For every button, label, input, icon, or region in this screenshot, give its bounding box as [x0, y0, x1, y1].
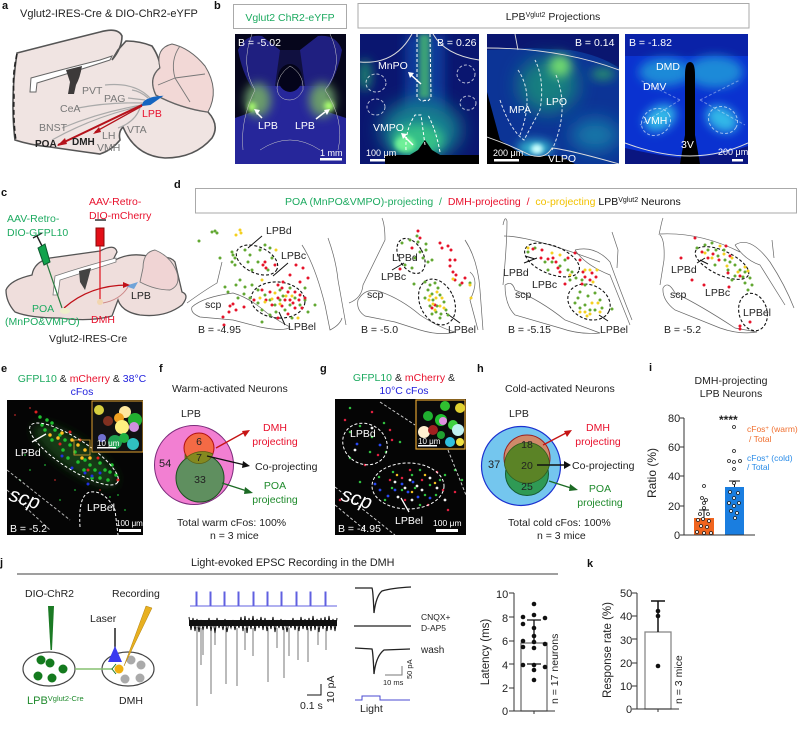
labels c	[5, 196, 152, 345]
spontaneous trace	[189, 616, 337, 706]
map B=-5.2: B = -5.2	[664, 324, 701, 336]
labels c: AAV-Retro-	[7, 213, 60, 225]
micrograph e: LPBd	[15, 447, 41, 459]
micrograph B=-1.82	[625, 34, 748, 164]
region labels: DMH	[72, 137, 95, 148]
title g: GFPL10 & mCherry &	[353, 372, 455, 384]
header: Vglut2 ChR2-eYFP	[234, 4, 346, 28]
header: LPB Vglut2 projections: Vglut2	[526, 12, 546, 19]
panel j: electrophysiology	[0, 557, 561, 718]
brain outline c	[6, 247, 186, 320]
venn labels h: Total cold cFos: 100%	[508, 517, 611, 529]
map B=-5.15: scp	[515, 289, 532, 301]
dashed cut edge	[13, 54, 17, 141]
recording schematic: DMH	[119, 695, 143, 707]
micrograph e: scp	[6, 484, 43, 514]
micrograph B=0.26: 100 μm	[366, 148, 396, 158]
legend i: (warm)	[769, 424, 798, 434]
latency chart: 8	[502, 613, 508, 625]
venn labels f: DMH	[263, 422, 287, 434]
brain outline	[13, 30, 215, 158]
header: LPB Vglut2 projections	[358, 4, 749, 28]
title h: Cold-activated Neurons	[505, 383, 615, 395]
cerebellum c	[140, 250, 178, 290]
micrograph B=0.14	[487, 34, 619, 165]
region labels: PVT	[82, 85, 103, 97]
panel letter g: g	[320, 363, 327, 375]
latency chart: 6	[502, 636, 508, 648]
micrograph g: LPBd	[350, 428, 376, 440]
evoked labels: D-AP5	[421, 623, 446, 633]
map B=-5.2: scp	[670, 289, 686, 301]
micrograph e: B = -5.2	[10, 523, 47, 535]
venn labels f: POA	[264, 480, 286, 492]
legend i: / Total	[747, 462, 770, 472]
callosum c	[53, 258, 116, 295]
venn labels h: POA	[589, 483, 611, 495]
panel g: cold micrograph	[320, 363, 466, 535]
axes k: 50	[620, 588, 632, 600]
venn labels h: projecting	[575, 436, 621, 448]
recording schematic: DIO-ChR2	[25, 588, 74, 600]
panel a: brain schematic	[2, 0, 215, 158]
latency chart: 4	[502, 660, 508, 672]
latency chart: 2	[502, 683, 508, 695]
venn circles f: 54	[159, 458, 171, 470]
labels c: DMH	[91, 314, 115, 326]
map B=-5.0: B = -5.0	[361, 324, 398, 336]
region labels: BNST	[39, 122, 68, 134]
grey projections	[52, 85, 150, 140]
legend i: cFos	[747, 424, 765, 434]
panel letter f: f	[159, 363, 163, 375]
panel e: warm micrograph	[1, 363, 147, 535]
region labels: LH	[102, 130, 115, 142]
panel c: viral injection schematic	[1, 187, 186, 345]
evoked labels: 10 ms	[383, 678, 404, 687]
panel b: projections	[214, 0, 749, 165]
ventricle	[66, 66, 82, 94]
light pulses	[190, 592, 337, 606]
region labels: PAG	[104, 93, 125, 105]
recording schematic: Recording	[112, 588, 160, 600]
venn labels f	[177, 422, 318, 542]
title i: DMH-projecting	[695, 375, 768, 387]
labels c: Vglut2-IRES-Cre	[49, 333, 127, 345]
venn circles f: 6	[196, 436, 202, 448]
venn labels h: Co-projecting	[572, 460, 635, 472]
micrograph g: B = -4.95	[338, 523, 381, 535]
venn labels f: Co-projecting	[255, 461, 318, 473]
red syringe	[95, 220, 106, 301]
labels c: DIO-GFPL10	[7, 227, 68, 239]
map B=-5.2: LPBel	[743, 307, 771, 319]
cerebellum	[153, 44, 213, 112]
micrograph B=0.14: VLPO	[548, 153, 576, 165]
micrograph B=-5.02: 1 mm	[320, 148, 342, 158]
ventricle c	[79, 268, 91, 290]
recording schematic: Vglut2-Cre	[48, 694, 84, 703]
LPB label h: LPB	[509, 408, 529, 420]
map B=-5.0: scp	[367, 289, 384, 301]
sample size k: n = 3 mice	[673, 655, 685, 704]
legend box: POA (MnPO&VMPO)-projecting / DMH-projecting / co-projecting LPB	[285, 196, 618, 208]
title f: Warm-activated Neurons	[172, 383, 288, 395]
micrograph B=-5.02: LPB	[295, 120, 315, 132]
map B=-4.95: LPBc	[281, 250, 306, 262]
venn labels h: DMH	[586, 422, 610, 434]
significance stars: ****	[719, 413, 738, 427]
map B=-5.15	[503, 219, 632, 336]
micrograph g: LPBel	[395, 515, 423, 527]
evoked labels: Light	[360, 703, 383, 715]
map B=-5.15: B = -5.15	[508, 324, 551, 336]
latency chart: n = 17 neurons	[549, 634, 561, 704]
micrograph B=0.26: VMPO	[373, 122, 404, 134]
recording schematic: LPB	[27, 695, 48, 707]
map B=-5.2: LPBd	[671, 264, 697, 276]
panel letter i: i	[649, 362, 652, 374]
map B=-5.15: LPBel	[600, 324, 628, 336]
region labels: POA	[35, 139, 57, 150]
legend i: +	[765, 426, 769, 432]
micrograph g: scp	[338, 484, 375, 514]
map B=-5.0	[349, 218, 483, 336]
panel letter c: c	[1, 187, 7, 199]
legend i: / Total	[749, 434, 772, 444]
panel f: warm venn	[154, 363, 318, 542]
legend box	[196, 188, 796, 213]
axes i: Ratio (%)	[645, 448, 659, 498]
axes i: 20	[668, 501, 680, 513]
axes k: 40	[620, 611, 632, 623]
trace scale bar: 0.1 s	[300, 700, 323, 712]
latency chart: 10	[496, 589, 508, 601]
region labels: VMH	[97, 142, 120, 154]
panel letter a: a	[2, 0, 9, 12]
labels c: DIO-mCherry	[89, 210, 152, 222]
data points	[696, 426, 742, 534]
venn circles f: 7	[196, 452, 202, 464]
micrograph B=-1.82: VMH	[644, 115, 667, 127]
axes i: 60	[668, 442, 680, 454]
axes i: 40	[668, 471, 680, 483]
labels c: (MnPO&VMPO)	[5, 316, 80, 328]
axes i	[645, 413, 755, 542]
red projections	[58, 105, 142, 145]
micrograph g	[335, 399, 466, 535]
axes k: Response rate (%)	[602, 602, 614, 698]
evoked labels	[360, 612, 451, 715]
micrograph B=0.26: B = 0.26	[437, 37, 477, 49]
venn circles f: 33	[194, 474, 206, 486]
arrows h	[537, 430, 578, 491]
evoked labels: 50 pA	[405, 659, 414, 679]
recording schematic	[23, 588, 160, 707]
LPB label: LPB	[181, 408, 201, 420]
panel g: cold micrograph: 10°C cFos	[379, 385, 429, 397]
arrows f	[207, 430, 253, 494]
header: LPB Vglut2 projections: LPB	[506, 11, 526, 23]
panel i: bar chart	[645, 362, 798, 542]
venn circles h: 37	[488, 459, 500, 471]
map B=-5.0: LPBd	[392, 252, 418, 264]
panel letter b: b	[214, 0, 221, 12]
micrograph B=0.26	[358, 34, 479, 164]
micrograph e	[6, 400, 143, 535]
map B=-4.95: LPBel	[288, 321, 316, 333]
bars	[694, 481, 744, 535]
micrograph B=0.14: LPO	[546, 96, 567, 108]
venn circles h: 18	[521, 439, 533, 451]
axes k: 10	[620, 681, 632, 693]
legend box: Neurons	[638, 196, 681, 208]
micrograph e: 100 μm	[116, 519, 143, 528]
venn labels f: projecting	[252, 494, 298, 506]
panel h: cold venn	[477, 363, 635, 542]
micrograph B=-1.82: 3V	[681, 139, 694, 151]
corpus callosum	[30, 56, 112, 92]
latency chart: Latency (ms)	[480, 619, 492, 685]
trace scale bar	[300, 676, 337, 712]
venn labels f: Total warm cFos: 100%	[177, 517, 286, 529]
micrograph B=0.26: MnPO	[378, 60, 408, 72]
venn labels h: projecting	[577, 497, 623, 509]
region labels: LPB	[142, 108, 162, 120]
axes i: 80	[668, 413, 680, 425]
micrograph B=-1.82: DMV	[643, 81, 666, 93]
panel i: bar chart: LPB Neurons	[700, 388, 762, 400]
latency chart	[480, 589, 561, 718]
venn circles h	[482, 426, 560, 506]
trace scale bar: 10 pA	[325, 676, 337, 703]
venn labels f: n = 3 mice	[210, 530, 259, 542]
title a: Vglut2-IRES-Cre & DIO-ChR2-eYFP	[20, 8, 198, 20]
map B=-5.15: LPBc	[532, 279, 557, 291]
labels c: LPB	[131, 290, 151, 302]
micrograph B=-1.82: 200 μm	[718, 147, 748, 157]
title j: Light-evoked EPSC Recording in the DMH	[191, 557, 394, 569]
micrograph g: 100 μm	[433, 518, 462, 528]
evoked labels: CNQX+	[421, 612, 451, 622]
map B=-5.0: LPBel	[448, 324, 476, 336]
panel letter h: h	[477, 363, 484, 375]
venn labels h	[508, 422, 635, 542]
panel letter d: d	[174, 179, 181, 191]
micrograph B=0.14: MPA	[509, 104, 531, 116]
inset e: 10 μm	[97, 439, 120, 448]
rule	[17, 573, 558, 575]
LPB blue area	[142, 97, 160, 105]
region labels: CeA	[60, 103, 80, 115]
evoked labels: wash	[420, 645, 444, 656]
panel letter k: k	[587, 558, 594, 570]
axes k	[602, 588, 679, 716]
venn labels h: n = 3 mice	[537, 530, 586, 542]
bar k	[645, 632, 671, 709]
venn circles f	[154, 426, 234, 504]
axes k: 20	[620, 658, 632, 670]
recording schematic: Laser	[90, 613, 117, 625]
panel e: warm micrograph: cFos	[71, 386, 93, 398]
region labels: VTA	[127, 124, 147, 136]
title e: GFPL10 & mCherry & 38°C	[18, 373, 147, 385]
map B=-4.95	[187, 225, 346, 336]
labels c: POA	[32, 303, 54, 315]
panel letter e: e	[1, 363, 7, 375]
micrograph B=-5.02	[235, 34, 346, 164]
inset g: 10 μm	[418, 437, 441, 446]
micrograph B=-5.02: B = -5.02	[238, 37, 281, 49]
micrograph B=0.14: 200 μm	[493, 148, 523, 158]
map B=-5.2: LPBc	[705, 287, 730, 299]
error bar and points	[651, 601, 665, 668]
micrograph B=-1.82: B = -1.82	[629, 37, 672, 49]
axes i: 0	[674, 530, 680, 542]
micrograph B=-5.02: LPB	[258, 120, 278, 132]
axes k: 30	[620, 635, 632, 647]
green syringe	[33, 233, 62, 308]
venn circles h: 20	[521, 460, 533, 472]
labels c: AAV-Retro-	[89, 196, 142, 208]
legend i: +	[765, 455, 769, 461]
map B=-4.95: LPBd	[266, 225, 292, 237]
header: Vglut2 ChR2-eYFP: Vglut2 ChR2-eYFP	[245, 12, 335, 24]
axes k: 0	[626, 704, 632, 716]
panel letter j: j	[0, 557, 3, 569]
panel d: neuron maps	[174, 179, 796, 336]
legend i	[747, 424, 798, 472]
panel k: response rate chart	[587, 558, 685, 716]
legend i: cFos	[747, 453, 765, 463]
evoked traces	[354, 587, 411, 700]
latency chart: 0	[502, 706, 508, 718]
map B=-5.2	[659, 218, 794, 336]
map B=-4.95: B = -4.95	[198, 324, 241, 336]
legend box: Vglut2	[618, 197, 638, 204]
header: LPB Vglut2 projections: Projections	[545, 11, 600, 23]
micrograph e: LPBel	[87, 502, 115, 514]
LPB blue and retrograde arrows	[60, 282, 138, 314]
legend i: (cold)	[769, 453, 793, 463]
venn circles h: 25	[521, 481, 533, 493]
map B=-5.15: LPBd	[503, 267, 529, 279]
venn labels f: projecting	[252, 436, 298, 448]
map B=-4.95: scp	[205, 299, 222, 311]
map B=-5.0: LPBc	[381, 271, 406, 283]
micrograph B=-1.82: DMD	[656, 61, 680, 73]
region labels	[35, 85, 162, 154]
micrograph B=0.14: B = 0.14	[575, 37, 615, 49]
